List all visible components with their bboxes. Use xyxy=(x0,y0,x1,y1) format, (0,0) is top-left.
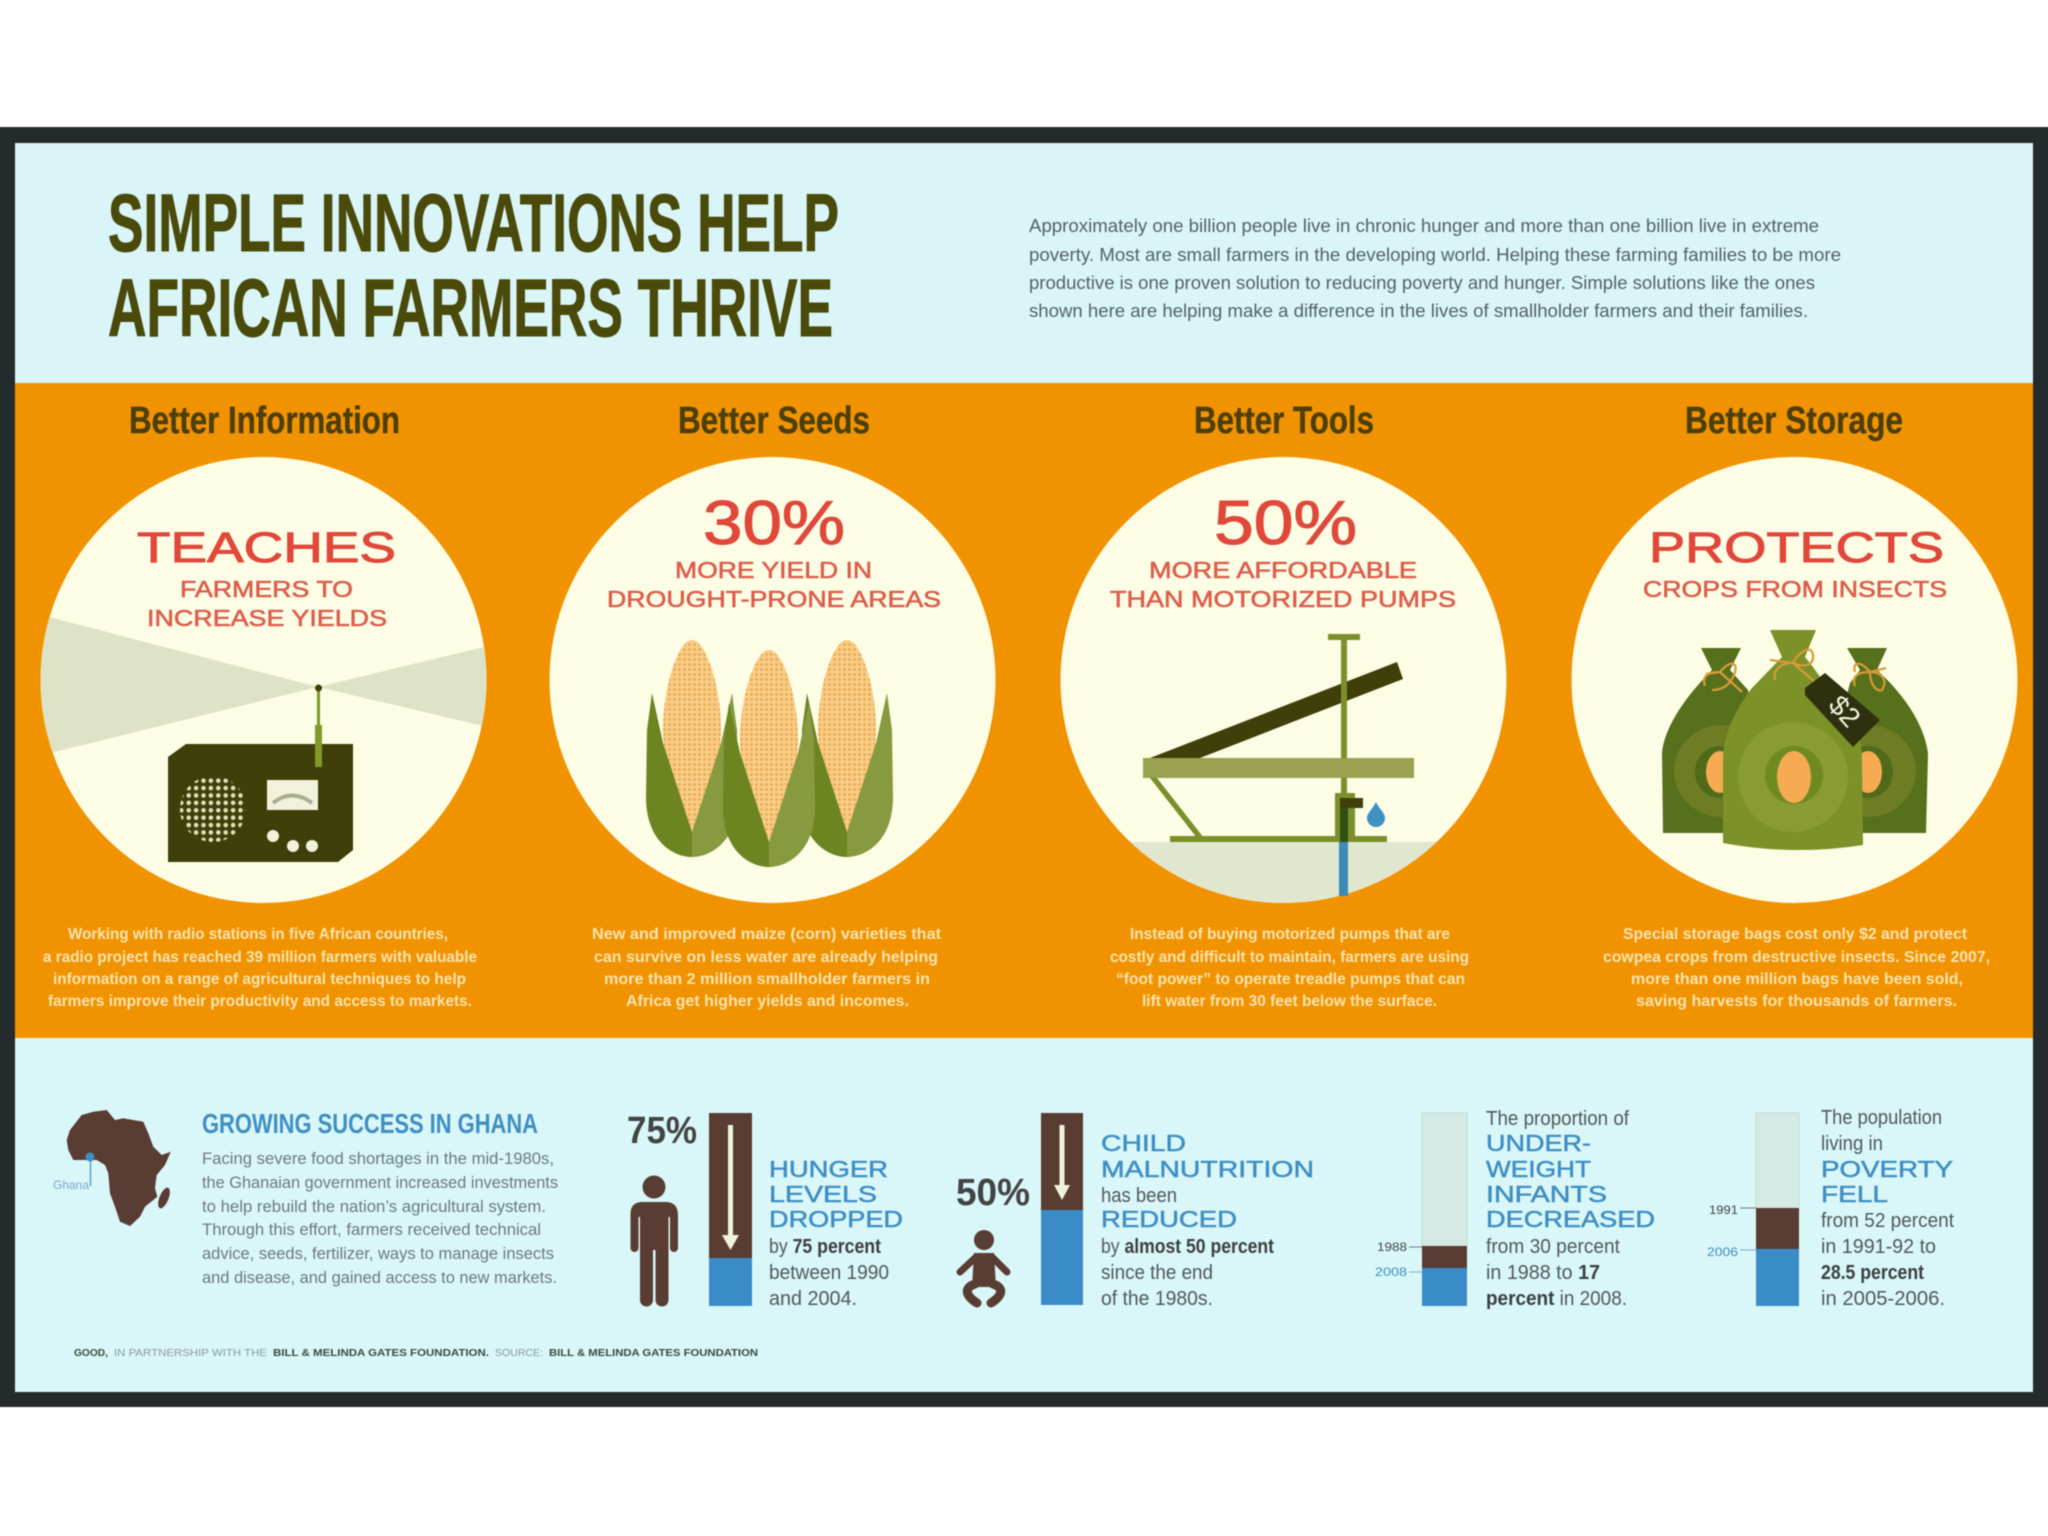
text: DROPPED xyxy=(769,1206,903,1232)
icon: radio xyxy=(168,684,353,862)
circle xyxy=(550,457,996,903)
headline: PROTECTS xyxy=(1649,524,1944,572)
description: cowpea crops from destructive insects. Since 2007, xyxy=(1603,949,1990,966)
icon: storage bags xyxy=(1662,630,1928,850)
icon: treadle pump xyxy=(1143,634,1414,896)
description: lift water from 30 feet below the surface. xyxy=(1142,993,1437,1010)
ghana text: and disease, and gained access to new markets. xyxy=(202,1268,557,1287)
ghana text xyxy=(202,1149,558,1287)
stat: poverty xyxy=(1707,1107,1954,1310)
description xyxy=(43,926,477,1010)
panel: better seeds xyxy=(550,400,996,1010)
heading: Better Storage xyxy=(1685,400,1903,442)
ghana text: Through this effort, farmers received technical xyxy=(202,1220,541,1239)
bar xyxy=(709,1113,752,1306)
panel: better tools xyxy=(1050,400,1520,1010)
intro text: Approximately one billion people live in chronic hunger and more than one billion live in extreme xyxy=(1029,216,1819,236)
description: more than 2 million smallholder farmers in xyxy=(604,971,930,988)
text: The proportion of xyxy=(1486,1108,1629,1130)
ghana text: to help rebuild the nation’s agricultural system. xyxy=(202,1197,546,1216)
bar xyxy=(1707,1113,1799,1306)
ghana text: Facing severe food shortages in the mid-1980s, xyxy=(202,1149,554,1168)
text: REDUCED xyxy=(1101,1206,1237,1232)
text: UNDER- xyxy=(1486,1130,1591,1156)
text xyxy=(1821,1107,1954,1310)
description: costly and difficult to maintain, farmers are using xyxy=(1110,949,1469,966)
heading: Better Information xyxy=(129,400,400,442)
stat: underweight infants xyxy=(1375,1108,1655,1310)
heading: Better Tools xyxy=(1194,400,1374,442)
title: AFRICAN FARMERS THRIVE xyxy=(108,263,833,354)
bar: 1988 xyxy=(1377,1240,1407,1254)
text: and 2004. xyxy=(769,1288,857,1310)
headline: 50% xyxy=(1214,489,1357,558)
ghana text: the Ghanaian government increased investments xyxy=(202,1173,558,1192)
description: information on a range of agricultural techniques to help xyxy=(53,971,466,988)
icon: baby xyxy=(960,1230,1007,1303)
text xyxy=(1101,1130,1314,1310)
circle xyxy=(1060,457,1506,903)
credits: GOOD, xyxy=(74,1347,108,1359)
description: Working with radio stations in five African countries, xyxy=(68,926,448,943)
text: FELL xyxy=(1821,1181,1888,1207)
headline: CROPS FROM INSECTS xyxy=(1643,576,1947,602)
credits: IN PARTNERSHIP WITH THE xyxy=(114,1347,267,1359)
text: by almost 50 percent xyxy=(1101,1236,1274,1258)
icon: africa map xyxy=(53,1110,172,1226)
text: in 2005-2006. xyxy=(1821,1288,1945,1310)
circle xyxy=(1572,457,2018,903)
panel: better information xyxy=(30,400,500,1010)
text: WEIGHT xyxy=(1486,1156,1591,1182)
text: CHILD xyxy=(1101,1130,1186,1156)
text: between 1990 xyxy=(769,1262,889,1284)
headline: DROUGHT-PRONE AREAS xyxy=(607,586,941,612)
description: a radio project has reached 39 million farmers with valuable xyxy=(43,949,477,966)
headline xyxy=(1110,489,1456,612)
text: HUNGER xyxy=(769,1156,888,1182)
ghana heading: GROWING SUCCESS IN GHANA xyxy=(202,1108,538,1139)
headline: INCREASE YIELDS xyxy=(147,605,387,631)
description: saving harvests for thousands of farmers. xyxy=(1636,993,1957,1010)
title: SIMPLE INNOVATIONS HELP xyxy=(108,178,839,269)
headline xyxy=(607,489,941,612)
circle xyxy=(40,457,486,903)
text: DECREASED xyxy=(1486,1206,1655,1232)
icon: corn xyxy=(646,640,893,867)
text: MALNUTRITION xyxy=(1101,1156,1314,1182)
intro text: productive is one proven solution to reducing poverty and hunger. Simple solutions like the ones xyxy=(1029,273,1815,293)
title xyxy=(108,178,839,354)
left bag xyxy=(1662,648,1770,833)
radio beams xyxy=(40,617,487,752)
headline xyxy=(137,524,396,631)
description: New and improved maize (corn) varieties that xyxy=(592,926,941,943)
description xyxy=(592,926,941,1010)
text: since the end xyxy=(1101,1262,1213,1284)
stat: child malnutrition xyxy=(956,1113,1314,1310)
bar xyxy=(1375,1113,1467,1306)
orange band xyxy=(15,383,2033,1038)
center bag xyxy=(1723,630,1863,850)
text: from 52 percent xyxy=(1821,1210,1954,1232)
headline: MORE YIELD IN xyxy=(675,557,872,583)
panel: better storage xyxy=(1572,400,2018,1010)
headline: TEACHES xyxy=(137,524,396,572)
intro text: shown here are helping make a difference in the lives of smallholder farmers and their families. xyxy=(1029,301,1808,321)
intro text xyxy=(1029,216,1841,321)
text: 28.5 percent xyxy=(1821,1262,1924,1284)
right bag xyxy=(1820,648,1928,833)
bar xyxy=(1041,1113,1083,1305)
text xyxy=(769,1156,903,1310)
text: POVERTY xyxy=(1821,1156,1953,1182)
bar: 2006 xyxy=(1707,1245,1738,1259)
description: can survive on less water are already helping xyxy=(594,949,938,966)
credits: BILL & MELINDA GATES FOUNDATION xyxy=(549,1347,758,1359)
text: LEVELS xyxy=(769,1181,877,1207)
price tag xyxy=(1805,673,1880,747)
credits xyxy=(74,1347,758,1359)
headline: THAN MOTORIZED PUMPS xyxy=(1110,586,1456,612)
header panel xyxy=(15,143,2033,383)
ghana text: advice, seeds, fertilizer, ways to manage insects xyxy=(202,1244,554,1263)
description: “foot power” to operate treadle pumps that can xyxy=(1116,971,1465,988)
ground xyxy=(1131,842,1436,904)
description xyxy=(1603,926,1990,1010)
text: percent in 2008. xyxy=(1486,1288,1627,1310)
icon: africa map: Ghana xyxy=(53,1178,89,1192)
stat: hunger xyxy=(627,1110,903,1310)
credits: SOURCE: xyxy=(495,1347,543,1359)
stat: child malnutrition: 50% xyxy=(956,1172,1030,1214)
description: Instead of buying motorized pumps that are xyxy=(1130,926,1450,943)
description: Special storage bags cost only $2 and protect xyxy=(1623,926,1967,943)
text: has been xyxy=(1101,1185,1177,1207)
icon: person xyxy=(630,1176,678,1306)
intro text: poverty. Most are small farmers in the developing world. Helping these farming families to be more xyxy=(1029,245,1841,265)
text: in 1991-92 to xyxy=(1821,1236,1936,1258)
footer panel xyxy=(15,1038,2033,1392)
price tag: $2 xyxy=(1823,689,1867,733)
credits: BILL & MELINDA GATES FOUNDATION. xyxy=(273,1347,489,1359)
text xyxy=(1486,1108,1655,1310)
text: by 75 percent xyxy=(769,1236,881,1258)
text: of the 1980s. xyxy=(1101,1288,1213,1310)
description: farmers improve their productivity and access to markets. xyxy=(48,993,472,1010)
text: The population xyxy=(1821,1107,1942,1129)
text: from 30 percent xyxy=(1486,1236,1620,1258)
description: Africa get higher yields and incomes. xyxy=(626,993,909,1010)
headline: MORE AFFORDABLE xyxy=(1149,557,1417,583)
bar: 1991 xyxy=(1709,1203,1738,1217)
description xyxy=(1110,926,1469,1010)
headline: FARMERS TO xyxy=(180,576,353,602)
text: in 1988 to 17 xyxy=(1486,1262,1600,1284)
bar: 2008 xyxy=(1375,1265,1407,1279)
text: INFANTS xyxy=(1486,1181,1607,1207)
description: more than one million bags have been sold, xyxy=(1631,971,1963,988)
headline xyxy=(1643,524,1947,602)
text: living in xyxy=(1821,1133,1883,1155)
headline: 30% xyxy=(703,489,845,558)
stat: hunger: 75% xyxy=(627,1110,697,1152)
heading: Better Seeds xyxy=(678,400,870,442)
